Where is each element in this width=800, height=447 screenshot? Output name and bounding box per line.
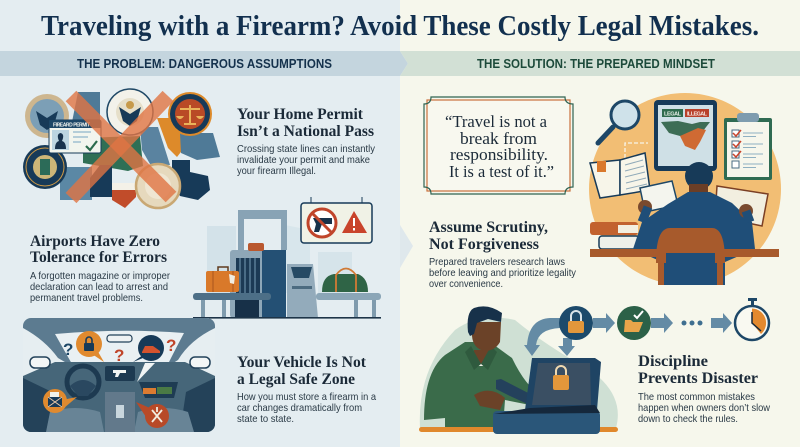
- text block: discipline: [638, 353, 771, 425]
- question marks: ?: [166, 336, 176, 355]
- text block: vehicle: Your Vehicle Is Not: [237, 354, 367, 371]
- text block: home permit: [237, 106, 376, 177]
- icon: magnifying glass: [598, 101, 639, 143]
- quote box: responsibility.: [450, 145, 548, 164]
- arrow: [651, 313, 673, 333]
- x-ray scanner: [230, 243, 286, 318]
- text block: home permit: your firearm Illegal.: [237, 166, 316, 177]
- centre screen with firearm: [105, 366, 135, 381]
- illustration: permit, seals and states crossed out: [23, 89, 220, 208]
- process flow: lock, folder, stopwatch: [524, 298, 769, 356]
- open book right: [715, 186, 768, 226]
- small document left: [640, 181, 678, 212]
- conveyor belt: [193, 293, 381, 319]
- text block: discipline: The most common mistakes: [638, 392, 755, 403]
- text block: discipline: down to check the rules.: [638, 414, 738, 425]
- icon: seal top left: [25, 94, 69, 138]
- open book: [590, 153, 650, 198]
- text block: airports: permanent travel problems.: [30, 293, 143, 304]
- progress dots: [682, 320, 702, 326]
- person from behind: [633, 162, 755, 285]
- lock circle: [559, 306, 593, 340]
- icon: green duffle bag: [322, 268, 368, 292]
- section banner: solution: THE SOLUTION: THE PREPARED MINDSET: [477, 57, 715, 71]
- text block: vehicle: a Legal Safe Zone: [237, 371, 355, 388]
- arrow: [593, 313, 615, 333]
- text block: airports: A forgotten magazine or improper: [30, 271, 171, 282]
- icon: seal with scales: [168, 92, 212, 136]
- text block: assume scrutiny: before leaving and prioritize legality: [429, 268, 577, 279]
- dashboard: [23, 362, 215, 432]
- text block: discipline: Discipline: [638, 353, 708, 370]
- text block: assume scrutiny: over convenience.: [429, 279, 503, 290]
- folder circle: [617, 306, 651, 340]
- arrow: [711, 313, 732, 333]
- text block: vehicle: How you must store a firearm in a: [237, 392, 376, 403]
- section banner: problem: [0, 51, 408, 76]
- speech bubble: lock: [76, 331, 104, 362]
- panel background: solution side: [400, 0, 800, 447]
- rearview mirror: [107, 335, 132, 342]
- firearm: [496, 379, 534, 406]
- open glovebox: [139, 382, 178, 398]
- question marks: ?: [63, 340, 73, 359]
- windshield: [55, 331, 184, 364]
- question marks: ?: [114, 346, 124, 365]
- tablet with legal map: LEGAL: [664, 112, 682, 118]
- icon: seal lower left: [23, 145, 67, 189]
- tablet with legal map: [654, 100, 717, 171]
- question marks: [63, 336, 176, 365]
- text block: airports: [30, 233, 171, 304]
- illustration: airport security checkpoint: [193, 197, 381, 319]
- section banner: solution: [400, 51, 800, 76]
- text block: vehicle: state to state.: [237, 414, 294, 425]
- text block: airports: Airports Have Zero: [30, 233, 160, 250]
- text block: assume scrutiny: Prepared travelers research laws: [429, 257, 565, 268]
- text block: airports: declaration can lead to arrest and: [30, 282, 168, 293]
- text block: assume scrutiny: Assume Scrutiny,: [429, 219, 548, 236]
- table: [419, 427, 618, 432]
- icon: orange suitcase: [206, 267, 239, 292]
- section banner: problem: THE PROBLEM: DANGEROUS ASSUMPTIONS: [77, 57, 332, 71]
- speech bubble: car: [133, 335, 164, 362]
- text block: discipline: Prevents Disaster: [638, 370, 758, 387]
- quote box: [424, 97, 573, 194]
- icon: firearm permit card: FIREARD PERMIT: [53, 122, 90, 128]
- dashed route arrow: [625, 143, 648, 158]
- steering wheel: [67, 366, 99, 398]
- lower cabin and seats: [23, 378, 50, 432]
- text block: vehicle: [237, 354, 376, 425]
- text block: home permit: Your Home Permit: [237, 106, 364, 123]
- text block: vehicle: car changes dramatically from: [237, 403, 362, 414]
- icon: firearm permit card: [49, 120, 101, 153]
- illustration: traveler researching laws: [589, 93, 781, 285]
- title: Traveling with a Firearm? Avoid These Costly Legal Mistakes.: [41, 11, 759, 42]
- sign: no firearms warning: [301, 197, 372, 243]
- man: [424, 306, 556, 427]
- speech bubble: no firearm: [136, 402, 169, 428]
- text block: airports: Tolerance for Errors: [30, 249, 167, 266]
- clipboard checklist: [724, 113, 772, 180]
- text block: home permit: Isn’t a National Pass: [237, 123, 374, 140]
- stack of books: [590, 222, 639, 249]
- icon: seal bottom: [136, 164, 180, 208]
- speech tail: glare: [137, 363, 155, 382]
- chair: [656, 228, 725, 285]
- side mirrors: [30, 357, 210, 368]
- quote box: break from: [460, 129, 537, 148]
- text block: home permit: invalidate your permit and make: [237, 155, 370, 166]
- metal detector gate: [238, 210, 287, 250]
- tablet with legal map: ILLEGAL: [687, 112, 708, 118]
- icon: crossed-out X: [71, 96, 171, 198]
- car roof and pillars: [23, 318, 215, 365]
- quote box: It is a test of it.”: [449, 162, 554, 181]
- text block: assume scrutiny: [429, 219, 577, 290]
- speech bubble: crossed case: [43, 389, 77, 413]
- text block: discipline: happen when owners don’t slow: [638, 403, 771, 414]
- desk: [590, 249, 779, 257]
- text block: assume scrutiny: Not Forgiveness: [429, 236, 539, 253]
- kiosk: [287, 264, 318, 318]
- icon: seal top centre: [107, 89, 153, 135]
- text block: home permit: Crossing state lines can instantly: [237, 144, 376, 155]
- panel background: problem side: [0, 0, 400, 447]
- icon: stopwatch: [735, 298, 769, 340]
- curved arrow to case: [524, 318, 575, 356]
- illustration: man locking firearm in case: [419, 306, 618, 434]
- chevron between panels: [400, 225, 413, 268]
- quote box: “Travel is not a: [445, 112, 547, 131]
- locked case: [493, 358, 601, 434]
- illustration: car interior: [23, 318, 215, 432]
